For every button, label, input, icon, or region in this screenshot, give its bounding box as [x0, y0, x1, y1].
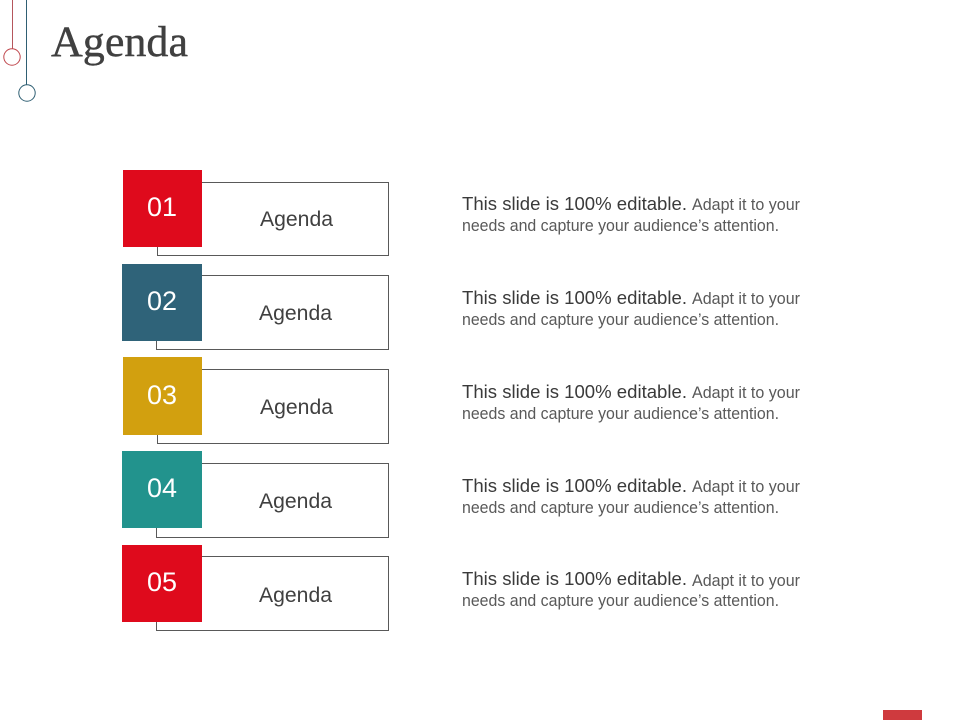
agenda row 01: [123, 170, 801, 256]
label box 04: [156, 464, 388, 538]
agenda row 04: [122, 451, 801, 538]
label 01: Agenda: [260, 208, 333, 231]
decorative pin: teal: [19, 0, 35, 101]
number tile 02: [122, 264, 202, 341]
number 01: 01: [147, 192, 177, 222]
number 03: 03: [147, 380, 177, 410]
description 02: needs and capture your audience’s attention.: [462, 311, 779, 329]
description 02: This slide is 100% editable.: [462, 287, 687, 308]
number tile 03: [123, 357, 202, 435]
description 02: [462, 287, 801, 329]
agenda row 03: [123, 357, 801, 444]
decorative pin: red: [4, 0, 20, 65]
agenda row 05: [122, 545, 801, 630]
description 04: needs and capture your audience’s attention.: [462, 499, 779, 517]
description 04: This slide is 100% editable.: [462, 475, 687, 496]
label 02: Agenda: [259, 302, 332, 325]
label box 05: [156, 556, 388, 630]
description 02: Adapt it to your: [692, 290, 801, 308]
label 04: Agenda: [259, 490, 332, 513]
description 03: Adapt it to your: [692, 384, 801, 402]
description 01: needs and capture your audience’s attention.: [462, 217, 779, 235]
label 05: Agenda: [259, 584, 332, 607]
label box 03: [158, 370, 388, 444]
label box 01: [158, 182, 388, 256]
description 03: needs and capture your audience’s attention.: [462, 405, 779, 423]
description 01: [462, 193, 801, 235]
description 01: This slide is 100% editable.: [462, 193, 687, 214]
description 03: [462, 381, 801, 423]
title: Agenda: [51, 19, 188, 66]
number 04: 04: [147, 473, 177, 503]
description 05: [462, 568, 801, 610]
agenda row 02: [122, 264, 801, 350]
description 04: [462, 475, 801, 517]
number tile 04: [122, 451, 202, 528]
footer accent tab: [883, 710, 922, 720]
label 03: Agenda: [260, 396, 333, 419]
description 05: Adapt it to your: [692, 572, 801, 590]
description 04: Adapt it to your: [692, 478, 801, 496]
description 03: This slide is 100% editable.: [462, 381, 687, 402]
description 05: needs and capture your audience’s attention.: [462, 592, 779, 610]
number 05: 05: [147, 567, 177, 597]
label box 02: [156, 276, 388, 350]
number tile 01: [123, 170, 202, 247]
number tile 05: [122, 545, 202, 622]
description 05: This slide is 100% editable.: [462, 568, 687, 589]
description 01: Adapt it to your: [692, 196, 801, 214]
number 02: 02: [147, 286, 177, 316]
